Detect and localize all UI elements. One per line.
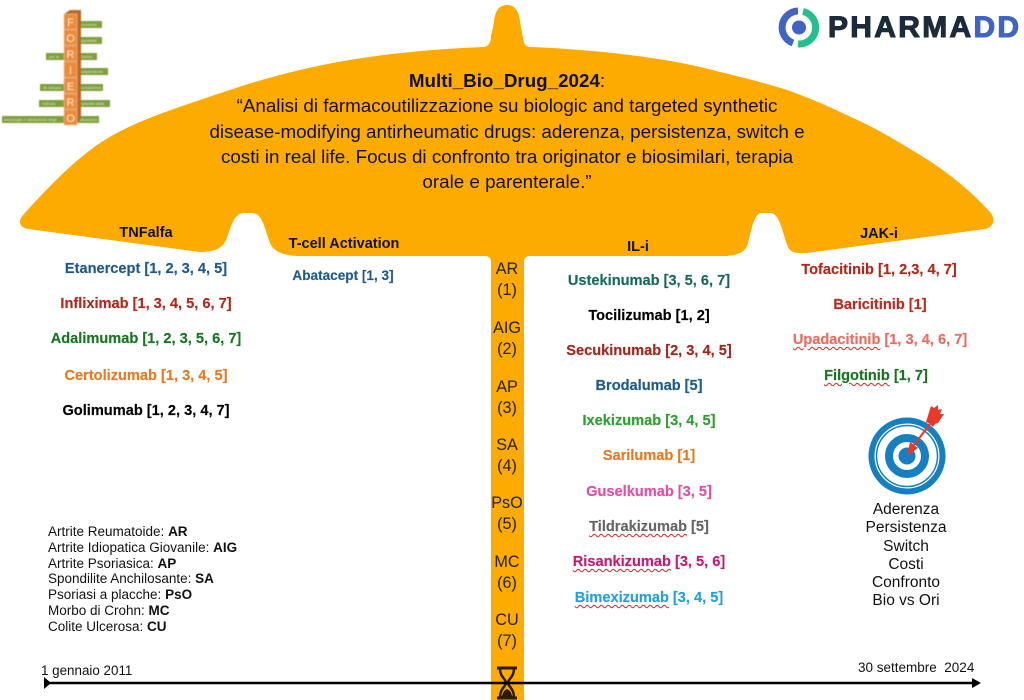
stem labels: indications: (7) — [497, 632, 517, 650]
list: IL-i drugs: Ustekinumab [3, 5, 6, 7] — [568, 273, 730, 289]
icon: FORIERO tower logo: fin sangue — [43, 85, 62, 90]
icon: FORIERO tower logo: per la — [49, 54, 60, 59]
stem labels: indications: AR — [496, 260, 518, 278]
list: IL-i drugs — [566, 273, 732, 608]
heading: JAK-i: JAK-i — [860, 226, 898, 242]
icon: FORIERO tower logo: spendibili — [80, 38, 97, 43]
list: TNFalfa drugs: Infliximab [1, 3, 4, 5, 6, 7] — [60, 296, 232, 312]
stem labels: indications: (3) — [497, 399, 517, 417]
icon: FORIERO tower logo — [1, 9, 111, 126]
text: outcomes: Aderenza — [873, 501, 939, 518]
icon: FORIERO tower logo: O — [66, 33, 75, 45]
icon: FORIERO tower logo: R — [67, 49, 75, 61]
list: TNFalfa drugs: Certolizumab [1, 3, 4, 5] — [64, 368, 228, 384]
icon: FORIERO tower logo: prevenire — [80, 22, 97, 27]
list: IL-i drugs: Secukinumab [2, 3, 4, 5] — [566, 343, 732, 359]
legend: abbreviations: Artrite Psoriasica: AP — [48, 556, 176, 571]
stem labels: indications: (5) — [497, 515, 517, 533]
text: outcomes — [866, 501, 946, 609]
list: JAK-i drugs: Tofacitinib [1, 2,3, 4, 7] — [801, 262, 957, 278]
list: JAK-i drugs: Baricitinib [1] — [833, 297, 927, 313]
icon: FORIERO tower logo: indipendente — [80, 69, 104, 74]
list: IL-i drugs: Brodalumab [5] — [595, 378, 703, 394]
stem labels: indications: AIG — [493, 319, 521, 337]
list: JAK-i drugs: Upadacitinib [1, 3, 4, 6, 7] — [793, 332, 967, 348]
text: outcomes: Switch — [883, 538, 929, 555]
list: TNFalfa drugs — [51, 261, 241, 419]
stem labels: indications: PsO — [491, 494, 523, 512]
text: outcomes: Costi — [888, 556, 924, 573]
list: IL-i drugs: Bimexizumab [3, 4, 5] — [575, 590, 723, 606]
stem labels: indications: (2) — [497, 340, 517, 358]
legend: abbreviations: Psoriasi a placche: PsO — [48, 587, 192, 602]
title: costi in real life. Focus di confronto tra originator e biosimilari, terapia — [221, 146, 793, 167]
legend: abbreviations: Artrite Idiopatica Giovanile: AIG — [48, 540, 237, 555]
icon: hourglass — [497, 666, 517, 700]
list: T-cell drugs: Abatacept [1, 3] — [292, 268, 394, 283]
title: “Analisi di farmacoutilizzazione su biologic and targeted synthetic — [237, 95, 777, 116]
list: JAK-i drugs: Filgotinib [1, 7] — [824, 368, 928, 384]
timeline end date: 30 settembre 2024 — [858, 660, 974, 675]
icon: FORIERO tower logo: I — [69, 65, 72, 77]
stem labels: indications: MC — [494, 553, 520, 571]
list: IL-i drugs: Sarilumab [1] — [603, 448, 695, 464]
title — [209, 70, 805, 192]
icon: FORIERO tower logo: ricerca — [80, 54, 93, 59]
legend: abbreviations: Artrite Reumatoide: AR — [48, 524, 188, 539]
list: IL-i drugs: Guselkumab [3, 5] — [586, 484, 712, 500]
heading: IL-i: IL-i — [627, 239, 649, 255]
text: outcomes: Persistenza — [866, 519, 946, 536]
heading: T-cell Activation: T-cell Activation — [289, 236, 399, 252]
icon: FORIERO tower logo: O — [66, 113, 75, 125]
icon: FORIERO tower logo: F — [67, 17, 74, 29]
list: JAK-i drugs — [792, 262, 967, 386]
text: outcomes: Confronto — [872, 574, 940, 591]
timeline start date: 1 gennaio 2011 — [41, 663, 132, 678]
legend: abbreviations: Morbo di Crohn: MC — [48, 603, 170, 618]
stem labels: indications — [491, 260, 523, 650]
text: outcomes: Bio vs Ori — [872, 592, 940, 609]
legend: abbreviations: Colite Ulcerosa: CU — [48, 619, 167, 634]
logo: PHARMADD: PHARMADD — [828, 11, 1021, 44]
icon: FORIERO tower logo: conoscenze — [80, 85, 102, 90]
title: disease-modifying antirheumatic drugs: aderenza, persistenza, switch e — [209, 121, 805, 142]
title: orale e parenterale.” — [422, 171, 592, 192]
stem labels: indications: AP — [496, 378, 518, 396]
stem labels: indications: (6) — [497, 574, 517, 592]
list: IL-i drugs: Risankizumab [3, 5, 6] — [573, 554, 725, 570]
icon: FORIERO tower logo: nell'uso — [42, 101, 56, 106]
logo: PHARMADD — [778, 8, 1021, 48]
list: TNFalfa drugs: Adalimumab [1, 2, 3, 5, 6, 7] — [51, 331, 241, 347]
heading: TNFalfa: TNFalfa — [119, 225, 173, 241]
stem labels: indications: SA — [496, 436, 518, 454]
title: Multi_Bio_Drug_2024: — [409, 70, 605, 91]
legend: abbreviations: Spondilite Anchilosante: SA — [48, 571, 214, 586]
icon: FORIERO tower logo: R — [67, 97, 75, 109]
timeline arrow — [44, 677, 981, 689]
list: IL-i drugs: Ixekizumab [3, 4, 5] — [582, 413, 716, 429]
icon: FORIERO tower logo: tecnologie e valutazione degli — [4, 117, 57, 122]
icon: FORIERO tower logo: E — [67, 81, 74, 93]
stem labels: indications: CU — [495, 611, 519, 629]
icon: target with arrow — [868, 405, 946, 494]
legend: abbreviations — [48, 524, 237, 634]
list: IL-i drugs: Tildrakizumab [5] — [589, 519, 709, 535]
icon: FORIERO tower logo: sicurezza — [80, 117, 98, 122]
stem labels: indications: (1) — [497, 281, 517, 299]
list: IL-i drugs: Tocilizumab [1, 2] — [588, 308, 710, 324]
list: TNFalfa drugs: Golimumab [1, 2, 3, 4, 7] — [62, 403, 230, 419]
stem labels: indications: (4) — [497, 457, 517, 475]
list: TNFalfa drugs: Etanercept [1, 2, 3, 4, 5] — [65, 261, 227, 277]
icon: FORIERO tower logo: episodio delle — [80, 101, 105, 106]
